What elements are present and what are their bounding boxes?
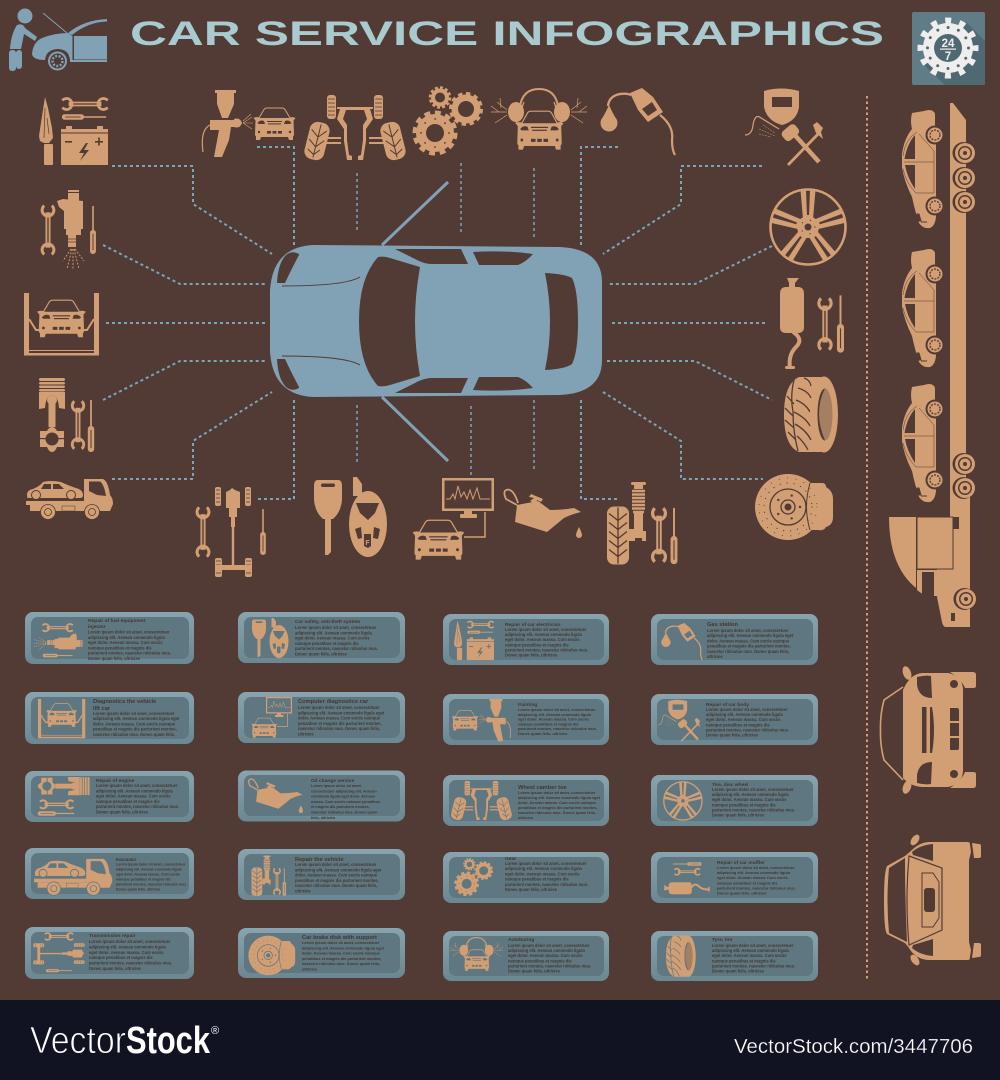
panel text: computer diagnostics: adipiscing elit. Aenean commodo ligula eget bbox=[298, 710, 385, 715]
panel text: car safety: eget dolor. Aenean massa. Cum sociis bbox=[295, 636, 370, 641]
panel text: evacuator: Evacuator bbox=[116, 857, 137, 862]
panel: diagnostics the vehicle bbox=[25, 692, 194, 744]
icon: autoburing bbox=[491, 89, 587, 150]
panel icon: keys bbox=[252, 618, 288, 658]
panel icon: suspension bbox=[251, 855, 286, 896]
icon: suspension repair bbox=[607, 482, 677, 564]
panel text: painting: natoque penatibus et magnis dis bbox=[518, 721, 579, 726]
panel text: computer diagnostics: ultricies bbox=[298, 732, 314, 736]
panel text: evacuator: parturient montes, nascetur ridiculus mus. bbox=[116, 882, 187, 886]
panel text: autoburing: Autoburing bbox=[508, 937, 534, 943]
panel: car muffler bbox=[651, 852, 818, 903]
panel: repair of fuel equipment bbox=[25, 612, 194, 664]
panel text: diagnostics: Lorem ipsum dolor sit amet, consectetuer bbox=[93, 711, 175, 716]
panel text: car body: natoque penatibus et magnis dis bbox=[706, 722, 770, 727]
icon: computer diagnostics bbox=[413, 478, 494, 560]
footer logo: ® bbox=[211, 1025, 219, 1037]
panel: car body bbox=[651, 694, 818, 745]
panel text: evacuator: adipiscing elit. Aenean commodo ligula bbox=[116, 868, 182, 872]
panel: evacuator bbox=[25, 848, 194, 899]
panel text: repair the vehicle: dolor. Aenean massa. Cum sociis natoque bbox=[295, 873, 378, 878]
panel text: tyre: eget dolor. Aenean massa. Cum sociis bbox=[712, 953, 787, 958]
panel text: painting: adipiscing elit. Aenean commodo ligula bbox=[518, 712, 592, 717]
panel text: painting: Lorem ipsum dolor sit amet, consectetuer bbox=[518, 707, 596, 712]
panel text: electrician: adipiscing elit. Aenean commodo ligula bbox=[505, 632, 582, 637]
panel text: painting: parturient montes, nascetur ridiculus mus. bbox=[518, 726, 597, 731]
rear view car bbox=[884, 833, 981, 967]
panel: tire, disc wheel bbox=[651, 775, 818, 826]
panel text: brake disk: adipiscing elit. Aenean commodo ligula eget bbox=[302, 945, 385, 950]
panel text: tyre: natoque penatibus et magnis dis bbox=[712, 958, 776, 963]
panel text: fuel equipment: eget dolor. Aenean massa. Cum sociis bbox=[88, 640, 163, 645]
panel text: muffler: natoque penatibus et magnis dis bbox=[717, 880, 778, 885]
panel text: tyre: Lorem ipsum dolor sit amet, consectetuer bbox=[712, 943, 794, 948]
panel text: car safety: natoque penatibus et magnis dis bbox=[295, 641, 359, 646]
icon: gas station bbox=[600, 88, 675, 155]
panel text: computer diagnostics: Computer diagnostics car bbox=[298, 699, 369, 705]
panel text: brake disk: nascetur ridiculus mus. Donec quam felis, bbox=[302, 961, 380, 966]
panel text: gear: Lorem ipsum dolor sit amet, consectetuer bbox=[505, 861, 587, 866]
panel text: wheel camber: Lorem ipsum dolor sit amet, consectetuer bbox=[518, 790, 596, 795]
panel text: muffler: adipiscing elit. Aenean commodo ligula bbox=[717, 870, 791, 875]
panel text: tyre: Donec quam felis, ultricies bbox=[712, 968, 765, 974]
panel text: diagnostics: adipiscing elit. Aenean commodo ligula eget bbox=[93, 716, 180, 721]
panel text: autoburing: Lorem ipsum dolor sit amet, consectetuer bbox=[508, 943, 590, 948]
panel icon: engine bbox=[38, 777, 90, 816]
panel text: painting: Donec quam felis, ultricies bbox=[518, 731, 567, 736]
panel text: brake disk: Car brake disk with support bbox=[302, 935, 377, 941]
icon: engine bbox=[39, 378, 94, 452]
panel text: muffler: parturient montes, nascetur ridiculus mus. bbox=[717, 885, 796, 890]
panel text: painting: Painting bbox=[518, 702, 537, 708]
panel icon: oil can bbox=[249, 779, 303, 813]
panel text: engine: parturient montes, nascetur ridiculus mus. bbox=[96, 804, 179, 809]
panel text: muffler: eget dolor. Aenean massa. Cum sociis bbox=[717, 875, 788, 880]
panel text: repair the vehicle: Lorem ipsum dolor sit amet, consectetuer bbox=[295, 862, 377, 867]
panel text: car safety: Lorem ipsum dolor sit amet, consectetuer bbox=[295, 625, 377, 630]
panel text: wheel camber: penatibus et magnis dis parturient montes, bbox=[518, 805, 598, 810]
panel text: engine: natoque penatibus et magnis dis bbox=[96, 799, 160, 804]
panel text: car safety: Donec quam felis, ultricies bbox=[295, 652, 348, 656]
panel text: transmission: Lorem ipsum dolor sit amet, consectetuer bbox=[89, 939, 171, 944]
panel text: car body: adipiscing elit. Aenean commodo ligula bbox=[706, 712, 783, 717]
title: CAR SERVICE INFOGRAPHICS bbox=[130, 15, 884, 53]
panel: tyre, tire bbox=[651, 931, 818, 981]
panel text: transmission: Donec quam felis, ultricies bbox=[89, 966, 142, 971]
panel: repair of engine bbox=[25, 771, 194, 822]
panel text: oil change: commodo ligula eget dolor. Aenean bbox=[311, 795, 376, 799]
panel text: brake disk: penatibus et magnis dis parturient montes, bbox=[302, 956, 382, 961]
panel text: autoburing: natoque penatibus et magnis dis bbox=[508, 958, 572, 963]
panel text: transmission: adipiscing elit. Aenean commodo ligula bbox=[89, 944, 166, 949]
panel text: electrician: natoque penatibus et magnis dis bbox=[505, 642, 569, 647]
panel icon: gears bbox=[455, 859, 492, 895]
panel text: brake disk: Lorem ipsum dolor sit amet, consectetuer bbox=[302, 940, 380, 945]
panel text: repair the vehicle: adipiscing elit. Aenean commodo ligula eget bbox=[295, 867, 382, 872]
icon: 24/7 gear badge bbox=[912, 12, 985, 85]
panel text: fuel equipment: injector bbox=[88, 624, 106, 630]
panel text: disc wheel: natoque penatibus et magnis dis bbox=[712, 802, 776, 807]
panel text: tyre: parturient montes, nascetur ridiculus mus. bbox=[712, 963, 795, 968]
panel text: muffler: Lorem ipsum dolor sit amet, consectetuer bbox=[717, 865, 795, 870]
panel text: evacuator: Lorem ipsum dolor sit amet, consectetuer bbox=[116, 862, 186, 866]
panel text: wheel camber: nascetur ridiculus mus. Donec quam felis, bbox=[518, 810, 596, 815]
panel text: car body: Donec quam felis, ultricies bbox=[706, 732, 759, 738]
icon: painting bbox=[202, 90, 296, 157]
panel text: muffler: Donec quam felis, ultricies bbox=[717, 890, 766, 896]
panel text: painting: eget dolor. Aenean massa. Cum sociis bbox=[518, 717, 589, 722]
icon: injector bbox=[42, 190, 96, 270]
panel text: transmission: Transmission repair bbox=[89, 933, 136, 939]
panel text: computer diagnostics: nascetur ridiculus mus. Donec quam felis, bbox=[298, 726, 380, 731]
panel text: gear: Donec quam felis, ultricies bbox=[505, 887, 558, 892]
panel text: oil change: felis, ultricies bbox=[311, 816, 335, 820]
panel text: oil change: Lorem ipsum dolor sit amet, bbox=[311, 784, 362, 788]
panel text: car body: Repair of car body bbox=[706, 702, 749, 708]
panel text: engine: Repair of engine bbox=[96, 778, 135, 784]
panel text: electrician: parturient montes, nascetur ridiculus mus. bbox=[505, 647, 588, 652]
panel text: disc wheel: eget dolor. Aenean massa. Cum sociis bbox=[712, 797, 787, 802]
panel text: oil change: nascetur ridiculus mus. Donec quam bbox=[311, 810, 378, 814]
panel text: electrician: Donec quam felis, ultricies bbox=[505, 652, 558, 658]
panel text: fuel equipment: parturient montes, nascetur ridiculus mus. bbox=[88, 651, 171, 656]
icon: car body repair bbox=[745, 88, 823, 165]
icon: disc wheel bbox=[770, 190, 846, 264]
panel text: gas station: Lorem ipsum dolor sit amet, consectetuer bbox=[707, 628, 789, 633]
panel text: disc wheel: parturient montes, nascetur ridiculus mus. bbox=[712, 807, 795, 812]
panel text: autoburing: Donec quam felis, ultricies bbox=[508, 968, 561, 974]
panel text: engine: eget dolor. Aenean massa. Cum sociis bbox=[96, 794, 171, 799]
panel icon: disc wheel bbox=[664, 782, 702, 820]
panel text: oil change: consectetuer adipiscing elit. Aenean bbox=[311, 789, 377, 793]
panel: gear bbox=[443, 852, 609, 903]
panel icon: brake disk bbox=[248, 936, 295, 975]
panel: car safety bbox=[238, 612, 405, 663]
panel text: electrician: Lorem ipsum dolor sit amet, consectetuer bbox=[505, 627, 587, 632]
icon: keys and alarm remote bbox=[314, 477, 387, 557]
panel text: fuel equipment: Lorem ipsum dolor sit amet, consectetuer bbox=[88, 630, 170, 634]
panel text: oil change: massa. Cum sociis natoque penatibus bbox=[311, 800, 380, 804]
panel text: gear: natoque penatibus et magnis dis bbox=[505, 877, 569, 882]
panel text: wheel camber: Wheel camber toe bbox=[518, 785, 567, 791]
panel icon: welding mask bbox=[658, 700, 700, 741]
panel text: transmission: natoque penatibus et magnis dis bbox=[89, 955, 153, 960]
panel text: brake disk: ultricies bbox=[302, 966, 317, 972]
panel text: gas station: Gas station bbox=[707, 622, 738, 628]
panel text: gas station: nascetur ridiculus mus. Donec quam felis, bbox=[707, 649, 789, 654]
panel icon: battery bbox=[454, 621, 494, 660]
panel: oil change bbox=[238, 770, 405, 822]
panel text: transmission: parturient montes, nascetur ridiculus mus. bbox=[89, 961, 172, 966]
icon: keys and alarm remote: F bbox=[365, 540, 370, 547]
panel text: disc wheel: Tire, disc wheel bbox=[712, 782, 749, 788]
header icon: mechanic and car bbox=[9, 8, 107, 72]
panel text: engine: adipiscing elit. Aenean commodo ligula bbox=[96, 788, 173, 793]
panel: car electrician bbox=[443, 614, 609, 665]
panel icon: transmission bbox=[33, 933, 85, 972]
panel: wheel camber toe bbox=[443, 775, 609, 826]
front view car bbox=[880, 665, 976, 795]
panel icon: muffler bbox=[664, 862, 710, 894]
panel text: autoburing: adipiscing elit. Aenean commodo ligula bbox=[508, 948, 585, 953]
panel text: transmission: eget dolor. Aenean massa. Cum sociis bbox=[89, 950, 164, 955]
panel icon: autoburing bbox=[450, 938, 503, 971]
footer logo: Stock bbox=[126, 1020, 211, 1062]
panel text: electrician: Repair of car electrician bbox=[505, 622, 560, 628]
panel text: repair the vehicle: penatibus et magnis dis parturient montes, bbox=[295, 878, 379, 883]
icon: muffler bbox=[780, 278, 844, 369]
central car, top view bbox=[270, 182, 602, 461]
panel text: muffler: Repair of car muffler bbox=[717, 860, 765, 866]
icon: transmission bbox=[197, 487, 266, 577]
icon: 24/7 gear badge: 7 bbox=[945, 51, 951, 63]
panel text: electrician: eget dolor. Aenean massa. Cum sociis bbox=[505, 637, 580, 642]
panel: painting bbox=[443, 694, 609, 745]
footer logo: Vector bbox=[30, 1020, 126, 1062]
panel: computer diagnostics bbox=[238, 692, 405, 743]
panel icon: wheel camber bbox=[450, 781, 513, 821]
panel text: evacuator: natoque penatibus et magnis dis bbox=[116, 878, 171, 882]
panel text: computer diagnostics: Lorem ipsum dolor sit amet, consectetuer bbox=[298, 705, 380, 710]
panel text: gear: Gear bbox=[505, 856, 516, 862]
panel text: computer diagnostics: dolor. Aenean massa. Cum sociis natoque bbox=[298, 716, 381, 721]
icon: electrician bbox=[39, 97, 108, 165]
panel text: autoburing: eget dolor. Aenean massa. Cum sociis bbox=[508, 953, 583, 958]
panel text: disc wheel: Lorem ipsum dolor sit amet, consectetuer bbox=[712, 787, 794, 792]
panel text: repair the vehicle: Repair the vehicle bbox=[295, 857, 344, 863]
panel text: disc wheel: adipiscing elit. Aenean commodo ligula bbox=[712, 792, 789, 797]
icon: gears bbox=[414, 88, 482, 154]
panel text: fuel equipment: Donec quam felis, ultricies bbox=[88, 656, 141, 661]
panel text: autoburing: parturient montes, nascetur ridiculus mus. bbox=[508, 963, 591, 968]
panel text: fuel equipment: adipiscing elit. Aenean commodo ligula bbox=[88, 635, 165, 640]
panel text: diagnostics: nascetur ridiculus mus. Donec quam felis, bbox=[93, 732, 175, 737]
panel text: diagnostics: lift car bbox=[93, 706, 111, 712]
dotted connector lines bbox=[103, 147, 772, 499]
panel icon: tyre bbox=[666, 935, 696, 977]
panel: transmission repair bbox=[25, 927, 194, 979]
panel: autoburing bbox=[443, 931, 609, 981]
icon: wheel camber bbox=[303, 95, 407, 162]
vertical dotted divider bbox=[866, 96, 868, 980]
footer bar bbox=[0, 1000, 1000, 1080]
panel: gas station bbox=[651, 614, 818, 665]
car transporter truck, top view bbox=[889, 103, 976, 627]
icon: car lift bbox=[24, 293, 99, 356]
panel: repair the vehicle bbox=[238, 849, 405, 900]
panel text: gear: adipiscing elit. Aenean commodo ligula bbox=[505, 866, 582, 871]
panel text: engine: Donec quam felis, ultricies bbox=[96, 810, 149, 814]
panel text: disc wheel: Donec quam felis, ultricies bbox=[712, 812, 765, 818]
panel text: gear: eget dolor. Aenean massa. Cum sociis bbox=[505, 871, 580, 876]
icon: evacuator bbox=[26, 479, 113, 520]
panel text: wheel camber: ultricies bbox=[518, 815, 533, 820]
panel text: engine: Lorem ipsum dolor sit amet, consectetuer bbox=[96, 783, 178, 788]
panel icon: fuel nozzle bbox=[661, 623, 702, 660]
icon: 24/7 gear badge: 24 bbox=[942, 38, 955, 50]
panel text: evacuator: eget dolor. Aenean massa. Cum sociis bbox=[116, 872, 180, 876]
panel text: brake disk: dolor. Aenean massa. Cum sociis natoque bbox=[302, 951, 381, 956]
panel icon: computer bbox=[251, 697, 292, 738]
panel text: gas station: dolor. Aenean massa. Cum sociis natoque bbox=[707, 638, 790, 643]
panel text: car body: eget dolor. Aenean massa. Cum sociis bbox=[706, 717, 781, 722]
panel text: fuel equipment: Repair of fuel equipment bbox=[88, 618, 146, 624]
panel text: evacuator: Donec quam felis, ultricies bbox=[116, 888, 160, 892]
panel icon: lift bbox=[38, 699, 85, 738]
panel text: gas station: adipiscing elit. Aenean commodo ligula eget bbox=[707, 633, 794, 638]
panel text: repair the vehicle: nascetur ridiculus mus. Donec quam felis, bbox=[295, 883, 377, 888]
panel text: computer diagnostics: penatibus et magnis dis parturient montes, bbox=[298, 721, 382, 726]
panel text: car safety: adipiscing elit. Aenean commodo ligula bbox=[295, 630, 372, 635]
panel text: tyre: Tyre, tire bbox=[712, 937, 733, 943]
panel text: wheel camber: adipiscing elit. Aenean commodo ligula eget bbox=[518, 795, 601, 800]
panel text: car body: Lorem ipsum dolor sit amet, consectetuer bbox=[706, 707, 788, 712]
panel text: diagnostics: Diagnostics the vehicle bbox=[93, 699, 156, 705]
panel text: repair the vehicle: ultricies bbox=[295, 888, 311, 894]
panel icon: injector bbox=[33, 624, 82, 657]
panel text: car body: parturient montes, nascetur ridiculus mus. bbox=[706, 727, 789, 732]
panel text: diagnostics: penatibus et magnis dis parturient montes, bbox=[93, 727, 177, 732]
panel text: gear: parturient montes, nascetur ridiculus mus. bbox=[505, 882, 588, 887]
panel text: oil change: et magnis dis parturient montes, bbox=[311, 805, 370, 809]
panel text: wheel camber: dolor. Aenean massa. Cum sociis natoque bbox=[518, 800, 597, 805]
panel text: gas station: ultricies bbox=[707, 654, 723, 659]
panel text: gas station: penatibus et magnis dis parturient montes, bbox=[707, 644, 791, 649]
icon: tyre bbox=[784, 376, 838, 452]
panel text: tyre: adipiscing elit. Aenean commodo ligula bbox=[712, 948, 789, 953]
panel text: car safety: parturient montes, nascetur ridiculus mus. bbox=[295, 646, 378, 651]
panel icon: evacuator bbox=[34, 859, 112, 895]
icon: brake disk bbox=[755, 474, 833, 540]
panel text: fuel equipment: natoque penatibus et magnis dis bbox=[88, 645, 152, 650]
panel: brake disk bbox=[238, 928, 405, 978]
panel text: oil change: Oil change service bbox=[311, 778, 355, 784]
panel text: diagnostics: dolor. Aenean massa. Cum sociis natoque bbox=[93, 721, 176, 726]
footer image id: VectorStock.com/3447706 bbox=[734, 1036, 973, 1058]
panel text: car safety: Car safety, anti-theft system bbox=[295, 619, 361, 625]
panel icon: spray gun bbox=[452, 699, 511, 741]
panels: info cards bbox=[25, 612, 818, 981]
icon: oil can bbox=[504, 490, 582, 538]
